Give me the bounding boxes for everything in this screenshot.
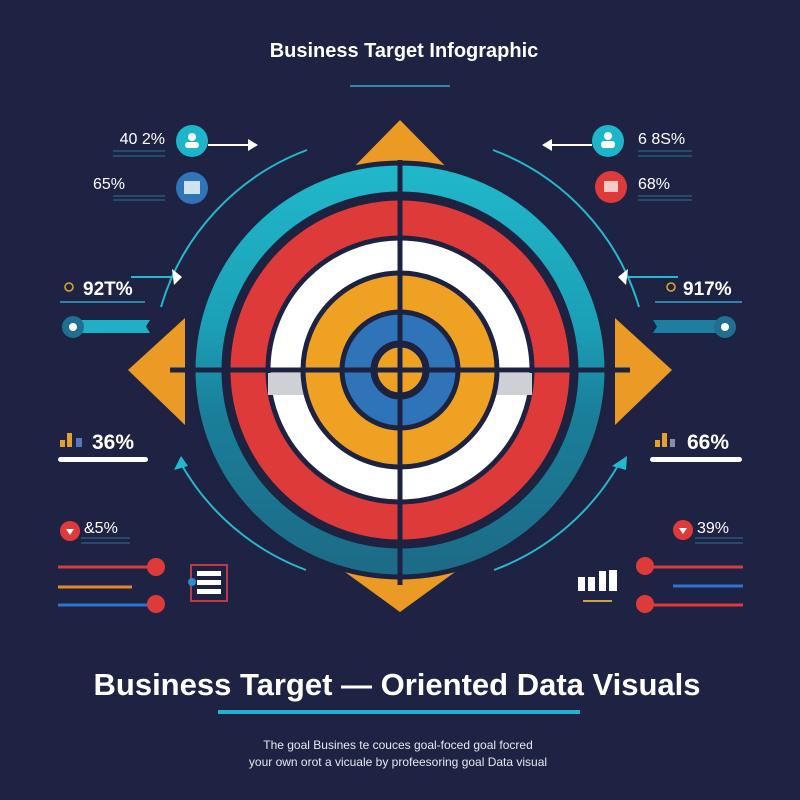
left stats: 92T% (83, 279, 133, 300)
description: your own orot a vicuale by profeesoring goal Data visual (249, 755, 547, 769)
description (249, 738, 547, 769)
title: Business Target Infographic (270, 40, 538, 62)
right stats: 917% (683, 279, 732, 300)
left stats (58, 125, 227, 613)
target (128, 120, 672, 612)
left stats: &5% (84, 520, 118, 537)
arrows (131, 139, 678, 470)
left stats: 40 2% (120, 131, 165, 148)
left stats: 65% (93, 176, 125, 193)
triangles (128, 120, 672, 612)
right stats: 66% (687, 431, 729, 454)
right stats: 6 8S% (638, 131, 685, 148)
description: The goal Busines te couces goal-foced goal focred (263, 738, 533, 752)
right stats: 68% (638, 176, 670, 193)
left stats: 36% (92, 431, 134, 454)
main heading: Business Target — Oriented Data Visuals (94, 667, 700, 702)
right stats (578, 125, 743, 613)
right stats: 39% (697, 520, 729, 537)
arcs (161, 150, 639, 570)
